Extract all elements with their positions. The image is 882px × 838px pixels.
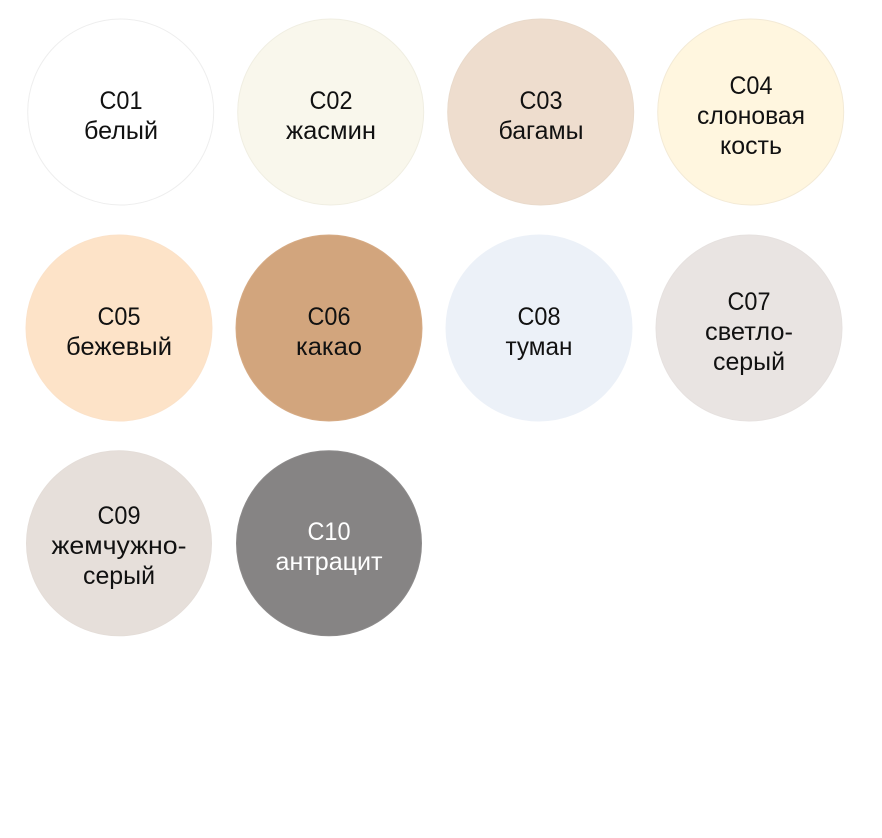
swatch: C04 слоновая кость: слоновая	[697, 102, 805, 130]
swatch: C04 слоновая кость	[658, 19, 844, 205]
swatch: C01 белый	[28, 19, 214, 205]
swatch: C03 багамы	[448, 19, 634, 205]
swatch: C09 жемчужно-серый: серый	[83, 562, 155, 590]
swatch: C03 багамы: багамы	[498, 117, 584, 145]
swatch: C08 туман	[446, 235, 632, 421]
swatch: C06 какао: C06	[308, 303, 350, 331]
swatch: C02 жасмин: жасмин	[286, 117, 376, 145]
swatch: C06 какао	[236, 235, 422, 421]
swatch: C07 светло-серый: светло-	[705, 318, 793, 346]
swatch: C06 какао: какао	[296, 333, 362, 361]
swatch: C09 жемчужно-серый	[26, 451, 212, 636]
swatch: C04 слоновая кость: кость	[720, 132, 782, 160]
swatch: C01 белый: белый	[84, 117, 158, 145]
swatch: C07 светло-серый: серый	[713, 348, 785, 376]
swatch: C09 жемчужно-серый: C09	[98, 502, 140, 530]
swatch: C04 слоновая кость: C04	[730, 72, 773, 100]
swatch: C09 жемчужно-серый: жемчужно-	[52, 532, 186, 560]
swatch: C10 антрацит: C10	[308, 518, 350, 546]
swatch: C08 туман: C08	[518, 303, 560, 331]
swatch: C07 светло-серый	[656, 235, 842, 421]
swatch: C10 антрацит: антрацит	[276, 548, 383, 576]
swatch: C02 жасмин	[238, 19, 424, 205]
swatch: C07 светло-серый: C07	[728, 288, 770, 316]
swatch: C05 бежевый	[26, 235, 212, 421]
swatch: C08 туман: туман	[506, 333, 572, 361]
swatch: C02 жасмин: C02	[310, 87, 352, 115]
swatch: C10 антрацит	[236, 451, 422, 636]
swatch: C03 багамы: C03	[520, 87, 562, 115]
swatch: C05 бежевый: C05	[98, 303, 140, 331]
swatch: C01 белый: C01	[100, 87, 142, 115]
swatch: C05 бежевый: бежевый	[66, 333, 172, 361]
